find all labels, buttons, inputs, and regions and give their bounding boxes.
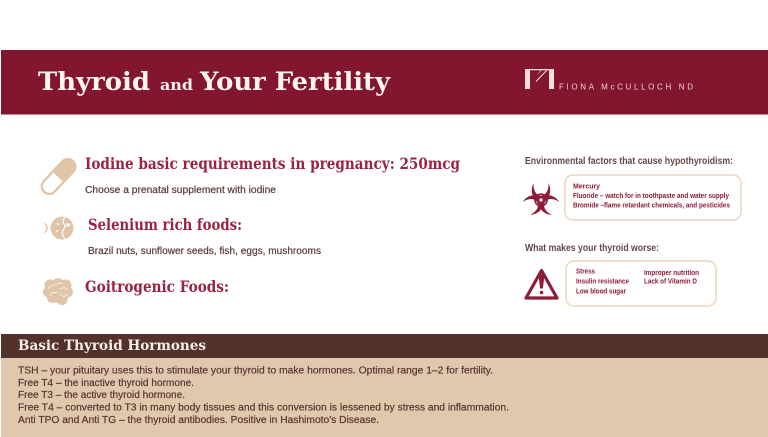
callout: thyroid worse factors [566, 261, 716, 306]
hormone list [18, 366, 509, 426]
heading: goitrogenic: Goitrogenic Foods: [85, 277, 229, 296]
heading: environmental factors: Environmental factors that cause hypothyroidism: [525, 156, 733, 167]
icon: capsule [39, 156, 78, 197]
heading bar [1, 334, 768, 358]
title: and [160, 77, 193, 94]
callout: environmental factors: Bromide –flame retardant chemicals, and pesticides [573, 202, 730, 210]
callout: environmental factors: Fluoride – watch for in toothpaste and water supply [573, 193, 729, 200]
heading: selenium: Selenium rich foods: [88, 215, 242, 234]
title: Thyroid [38, 67, 150, 96]
callout: thyroid worse factors: Improper nutrition [644, 270, 699, 277]
hormone list: Free T3 – the active thyroid hormone. [18, 390, 185, 401]
icon: selenium fish [44, 216, 74, 240]
heading: iodine: Iodine basic requirements in pregnancy: 250mcg [85, 154, 460, 173]
logo: Fiona McCulloch ND: FIONA McCULLOCH ND [559, 82, 693, 92]
callout: thyroid worse factors: Stress [576, 268, 595, 276]
hormone list: Free T4 – converted to T3 in many body tissues and this conversion is lessened by stress and inflammation. [18, 402, 509, 414]
title [38, 67, 392, 96]
text: prenatal supplement: Choose a prenatal supplement with iodine [85, 185, 276, 196]
icon: biohazard [522, 183, 560, 216]
callout: thyroid worse factors: Low blood sugar [576, 288, 626, 296]
heading bar: Basic Thyroid Hormones [18, 338, 206, 354]
hormone list: Anti TPO and Anti TG – the thyroid antibodies. Positive in Hashimoto's Disease. [18, 415, 379, 426]
callout: environmental factors: Mercury [573, 184, 600, 190]
callout: environmental factors [565, 175, 741, 220]
logo: Fiona McCulloch ND [525, 69, 693, 92]
icon: broccoli [43, 278, 73, 305]
icon: warning triangle [526, 270, 557, 298]
title: Your Fertility [199, 67, 392, 96]
callout: thyroid worse factors: Lack of Vitamin D [644, 278, 697, 286]
hormone list: Free T4 – the inactive thyroid hormone. [18, 378, 194, 389]
panel: basic thyroid hormones [1, 334, 768, 437]
heading: what makes thyroid worse: What makes your thyroid worse: [525, 243, 659, 254]
header band [1, 50, 768, 114]
hormone list: TSH – your pituitary uses this to stimulate your thyroid to make hormones. Optimal range 1–2 for fertility. [18, 366, 493, 376]
callout: thyroid worse factors: Insulin resistance [576, 278, 629, 286]
text: selenium foods: Brazil nuts, sunflower seeds, fish, eggs, mushrooms [88, 246, 321, 257]
